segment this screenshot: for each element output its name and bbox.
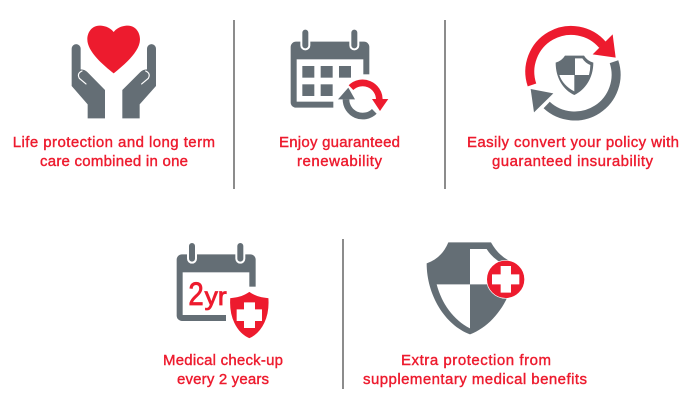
panel: medical check-up: [163, 242, 283, 388]
caption: extra protection: [363, 352, 587, 388]
icon: calendar with 2yr and medical shield: [177, 242, 270, 339]
caption: medical check-up: Medical check-up: [163, 352, 283, 369]
caption: convert policy: [467, 134, 679, 170]
panel: guaranteed renewability: [279, 29, 400, 170]
icon: heart held by hands: [72, 26, 156, 118]
caption: guaranteed renewability: [279, 134, 400, 170]
panel: convert policy: [467, 30, 679, 170]
caption: medical check-up: every 2 years: [177, 371, 269, 388]
caption: convert policy: guaranteed insurability: [492, 153, 654, 170]
caption: life protection: care combined in one: [40, 153, 188, 170]
icon: shield with circular arrows: [530, 30, 616, 116]
caption: extra protection: supplementary medical benefits: [363, 371, 587, 388]
caption: life protection: Life protection and long term: [13, 134, 215, 151]
caption: guaranteed renewability: renewability: [297, 153, 382, 170]
icon: shield with medical cross: [427, 242, 525, 334]
caption: extra protection: Extra protection from: [401, 352, 551, 369]
icon: calendar with renew arrows: [291, 29, 388, 116]
icon: calendar with 2yr and medical shield: 2: [188, 275, 204, 312]
panel: extra protection: [363, 242, 587, 388]
icon: calendar with 2yr and medical shield: yr: [205, 284, 227, 311]
caption: medical check-up: [163, 352, 283, 388]
caption: life protection: [13, 134, 215, 170]
caption: guaranteed renewability: Enjoy guaranteed: [279, 134, 400, 151]
caption: convert policy: Easily convert your policy with: [467, 134, 679, 151]
panel: life protection: [13, 26, 215, 170]
